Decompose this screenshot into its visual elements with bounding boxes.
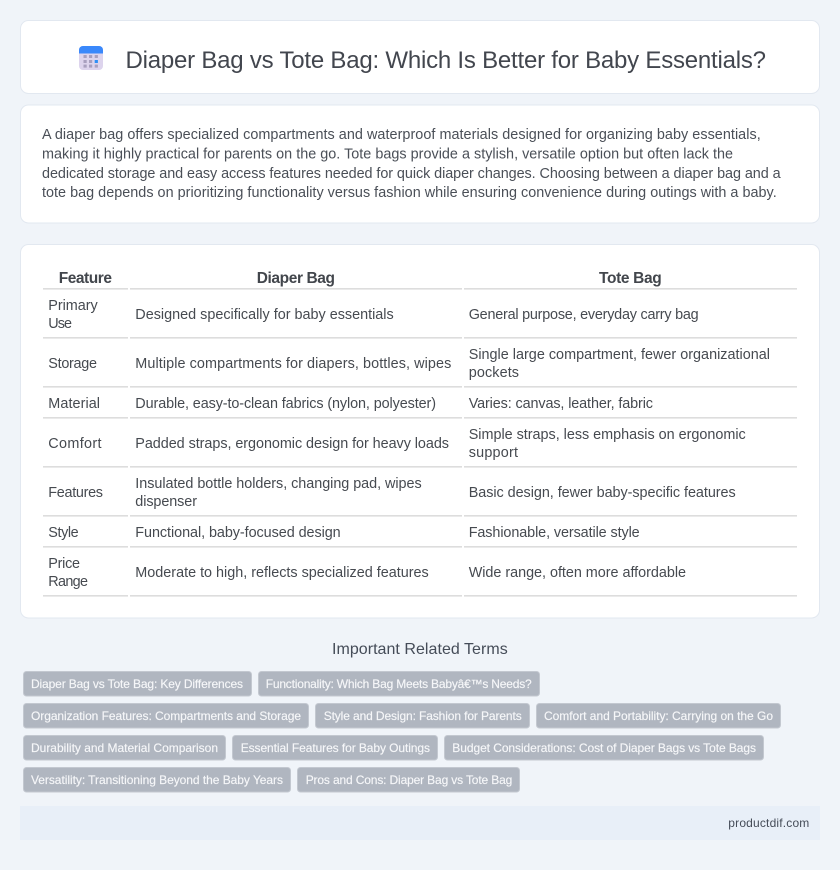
tag: Diaper Bag vs Tote Bag: Key Differences [31, 677, 243, 691]
text block: introduction paragraph: tote bag depends on prioritizing functionality versus fashion while ensuring convenience during outings with a baby. [42, 185, 777, 201]
table row: features: dispenser [135, 494, 197, 510]
table row: price range [43, 556, 797, 597]
heading: important related terms: Important Related Terms [332, 641, 508, 658]
footer [20, 806, 820, 840]
panel: introduction [20, 105, 820, 223]
icon: calendar [79, 46, 103, 70]
table row: storage: pockets [469, 365, 519, 381]
tag: Functionality: Which Bag Meets Babyâ€™s Needs? [266, 677, 532, 691]
title: Diaper Bag vs Tote Bag: Which Is Better for Baby Essentials? [126, 47, 766, 74]
panel: comparison table [20, 244, 820, 618]
table row: primary use: Primary [48, 298, 98, 314]
table row: style: Style [48, 525, 79, 541]
table row: price range: Moderate to high, reflects specialized features [135, 565, 429, 581]
table row: storage: Single large compartment, fewer organizational [469, 347, 770, 363]
tag [444, 736, 764, 760]
tag [24, 736, 226, 760]
table row: style: Functional, baby-focused design [135, 525, 341, 541]
tag: Organization Features: Compartments and Storage [31, 709, 301, 723]
text block: introduction paragraph: making it highly practical for parents on the go. Tote bags provide a stylish, versatile option but often lack the [42, 146, 733, 162]
table row: price range: Range [48, 574, 88, 590]
table row: comfort [43, 427, 797, 468]
table row: material: Material [48, 396, 100, 412]
table row: features: Features [48, 485, 103, 501]
table row: comfort: Padded straps, ergonomic design for heavy loads [135, 436, 449, 452]
table row: primary use: Use [48, 316, 72, 332]
tag: Comfort and Portability: Carrying on the Go [544, 709, 773, 723]
tag: Essential Features for Baby Outings [241, 741, 430, 755]
tag [298, 768, 520, 792]
table row: comfort: Simple straps, less emphasis on ergonomic [469, 427, 746, 443]
table row: material: Durable, easy-to-clean fabrics (nylon, polyester) [135, 396, 436, 412]
table row: storage [43, 347, 797, 388]
tag: Style and Design: Fashion for Parents [324, 709, 522, 723]
table header row: Diaper Bag [257, 270, 335, 287]
table row: features [43, 476, 797, 517]
tag: Versatility: Transitioning Beyond the Baby Years [31, 773, 283, 787]
panel: header [20, 20, 820, 94]
tag [258, 672, 540, 696]
tag list: related terms [24, 672, 780, 792]
table row: price range: Price [48, 556, 80, 572]
table row: material [43, 396, 797, 419]
text block: introduction paragraph [42, 127, 781, 201]
table row: primary use: General purpose, everyday carry bag [469, 307, 699, 323]
table row: features: Insulated bottle holders, changing pad, wipes [135, 476, 422, 492]
table row: style: Fashionable, versatile style [469, 525, 640, 541]
table row: storage: Storage [48, 356, 97, 372]
tag [536, 704, 780, 728]
table row: price range: Wide range, often more affordable [469, 565, 686, 581]
table row: features: Basic design, fewer baby-specific features [469, 485, 736, 501]
text block: introduction paragraph: A diaper bag offers specialized compartments and waterproof materials designed for organizing baby essentials, [42, 127, 761, 143]
tag: Durability and Material Comparison [31, 741, 218, 755]
tag [316, 704, 530, 728]
table row: storage: Multiple compartments for diapers, bottles, wipes [135, 356, 451, 372]
table row: primary use: Designed specifically for baby essentials [135, 307, 394, 323]
tag [24, 768, 290, 792]
table row: primary use [43, 298, 797, 339]
table header row: Tote Bag [599, 270, 662, 287]
table row: material: Varies: canvas, leather, fabric [469, 396, 653, 412]
text block: introduction paragraph: dedicated storage and easy access features needed for quick diaper changes. Choosing between a diaper bag and a [42, 166, 781, 182]
tag: Pros and Cons: Diaper Bag vs Tote Bag [306, 773, 512, 787]
table header row: Feature [59, 270, 112, 287]
tag: Budget Considerations: Cost of Diaper Bags vs Tote Bags [452, 741, 756, 755]
tag [232, 736, 438, 760]
table header row [43, 270, 797, 290]
tag [24, 704, 308, 728]
table row: comfort: support [469, 445, 518, 461]
footer text: site name: productdif.com [728, 816, 809, 830]
tag [24, 672, 252, 696]
table row: style [43, 525, 797, 548]
table row: comfort: Comfort [48, 436, 102, 452]
